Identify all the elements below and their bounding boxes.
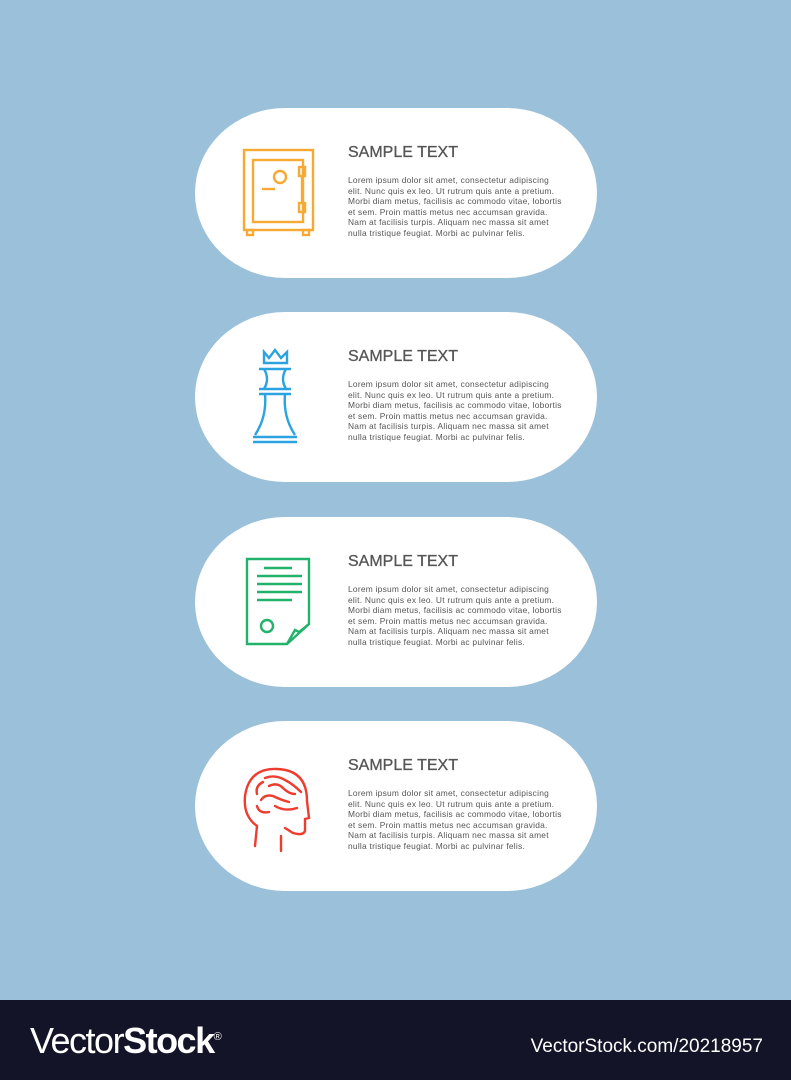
- footer bar: [0, 1000, 791, 1080]
- heading: SAMPLE TEXT: [348, 553, 458, 570]
- text block: et sem. Proin mattis metus nec accumsan gravida.: [348, 410, 548, 420]
- text block: [348, 584, 562, 646]
- heading: SAMPLE TEXT: [348, 757, 458, 774]
- icon: safe: [242, 148, 314, 236]
- panel: safe: [195, 108, 597, 278]
- text block: nulla tristique feugiat. Morbi ac pulvinar felis.: [348, 840, 525, 850]
- text block: elit. Nunc quis ex leo. Ut rutrum quis ante a pretium.: [348, 390, 554, 400]
- text block: Morbi diam metus, facilisis ac commodo vitae, lobortis: [348, 196, 562, 206]
- text block: Nam at facilisis turpis. Aliquam nec massa sit amet: [348, 217, 549, 227]
- text block: elit. Nunc quis ex leo. Ut rutrum quis ante a pretium.: [348, 594, 554, 604]
- heading: SAMPLE TEXT: [348, 144, 458, 161]
- panel: document: [195, 517, 597, 687]
- text block: Lorem ipsum dolor sit amet, consectetur adipiscing: [348, 788, 549, 798]
- text block: et sem. Proin mattis metus nec accumsan gravida.: [348, 820, 548, 830]
- heading: SAMPLE TEXT: [348, 348, 458, 365]
- text block: elit. Nunc quis ex leo. Ut rutrum quis ante a pretium.: [348, 798, 554, 808]
- text block: [348, 788, 562, 850]
- text block: Nam at facilisis turpis. Aliquam nec massa sit amet: [348, 626, 549, 636]
- text block: elit. Nunc quis ex leo. Ut rutrum quis ante a pretium.: [348, 186, 554, 196]
- footer url: VectorStock.com/20218957: [531, 1036, 763, 1057]
- text block: nulla tristique feugiat. Morbi ac pulvinar felis.: [348, 228, 525, 238]
- text block: [348, 379, 562, 442]
- panel: chess queen: [195, 312, 597, 482]
- text block: Lorem ipsum dolor sit amet, consectetur adipiscing: [348, 584, 549, 594]
- text block: Morbi diam metus, facilisis ac commodo vitae, lobortis: [348, 400, 562, 410]
- text block: Morbi diam metus, facilisis ac commodo vitae, lobortis: [348, 605, 562, 615]
- icon: document: [246, 558, 310, 646]
- icon: head with brain: [244, 768, 310, 852]
- text block: et sem. Proin mattis metus nec accumsan gravida.: [348, 206, 548, 216]
- text block: Lorem ipsum dolor sit amet, consectetur adipiscing: [348, 379, 549, 389]
- text block: nulla tristique feugiat. Morbi ac pulvinar felis.: [348, 432, 525, 442]
- text block: nulla tristique feugiat. Morbi ac pulvinar felis.: [348, 636, 525, 646]
- text block: Lorem ipsum dolor sit amet, consectetur adipiscing: [348, 175, 549, 185]
- icon: chess queen: [253, 348, 297, 444]
- text block: [348, 175, 562, 238]
- text block: Morbi diam metus, facilisis ac commodo vitae, lobortis: [348, 809, 562, 819]
- text block: et sem. Proin mattis metus nec accumsan gravida.: [348, 616, 548, 626]
- text block: Nam at facilisis turpis. Aliquam nec massa sit amet: [348, 830, 549, 840]
- text block: Nam at facilisis turpis. Aliquam nec massa sit amet: [348, 421, 549, 431]
- panel: brain: [195, 721, 597, 891]
- logo: VectorStock®: [30, 1020, 220, 1061]
